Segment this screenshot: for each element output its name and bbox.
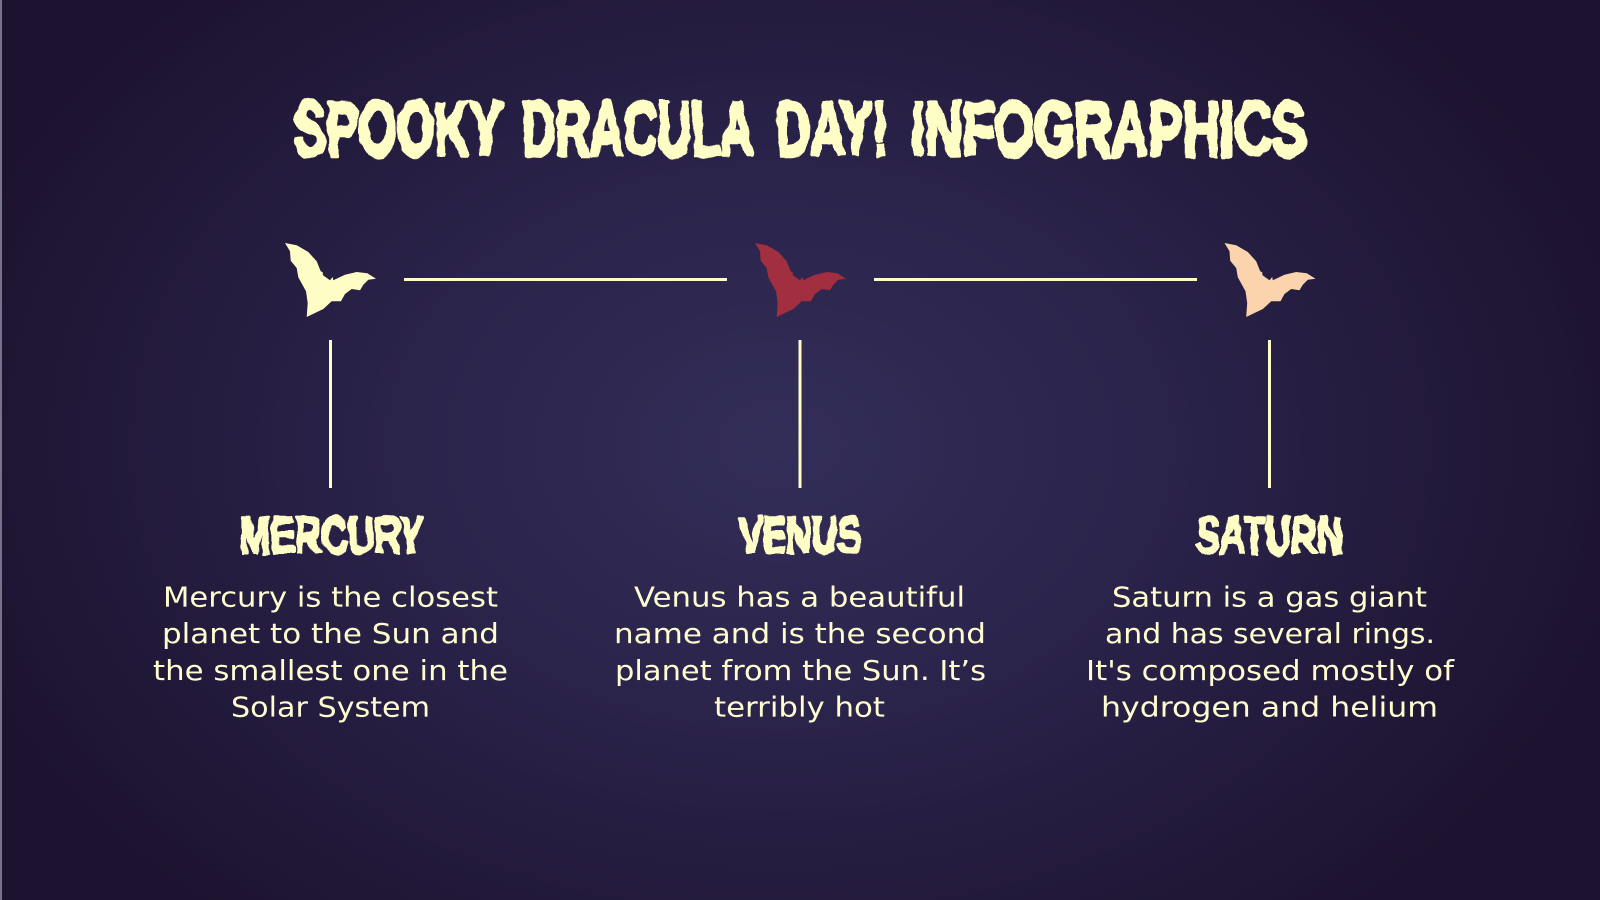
icon: cream bat (285, 243, 376, 317)
text block: Saturn description: hydrogen and helium (1101, 690, 1438, 724)
text block: Venus description: Venus has a beautiful (634, 580, 965, 614)
timeline connector: Mercury to Venus (404, 278, 727, 281)
text block: Venus description: planet from the Sun. It’s (615, 654, 986, 687)
title: INFOGRAPHICS (911, 87, 1306, 172)
title: SPOOKY (294, 87, 502, 172)
title: DRACULA (522, 87, 754, 172)
icon: peach bat (1224, 243, 1316, 317)
title (294, 87, 1306, 172)
icon: red bat (755, 243, 846, 317)
text block: Mercury description: Solar System (231, 690, 430, 724)
vertical stem: Mercury (329, 340, 332, 488)
text block: Venus description: name and is the second (614, 617, 986, 650)
text block: Saturn description: and has several rings. (1105, 617, 1435, 650)
vertical stem: Venus (798, 340, 802, 488)
text block: Saturn description (1086, 580, 1455, 724)
text block: Venus description (614, 580, 986, 724)
text block: Mercury description (153, 580, 508, 724)
timeline connector: Venus to Saturn (874, 278, 1197, 281)
text block: Mercury description: Mercury is the closest (163, 580, 498, 614)
text block: Venus description: terribly hot (714, 690, 885, 724)
title: DAY! (776, 87, 888, 172)
text block: Saturn description: Saturn is a gas giant (1112, 580, 1427, 614)
heading: Venus: VENUS (739, 507, 861, 565)
text block: Mercury description: the smallest one in the (153, 654, 508, 687)
heading: Mercury: MERCURY (240, 507, 424, 565)
vertical stem: Saturn (1268, 340, 1271, 488)
text block: Mercury description: planet to the Sun and (162, 617, 499, 650)
text block: Saturn description: It's composed mostly of (1086, 654, 1455, 687)
heading: Saturn: SATURN (1196, 507, 1343, 565)
